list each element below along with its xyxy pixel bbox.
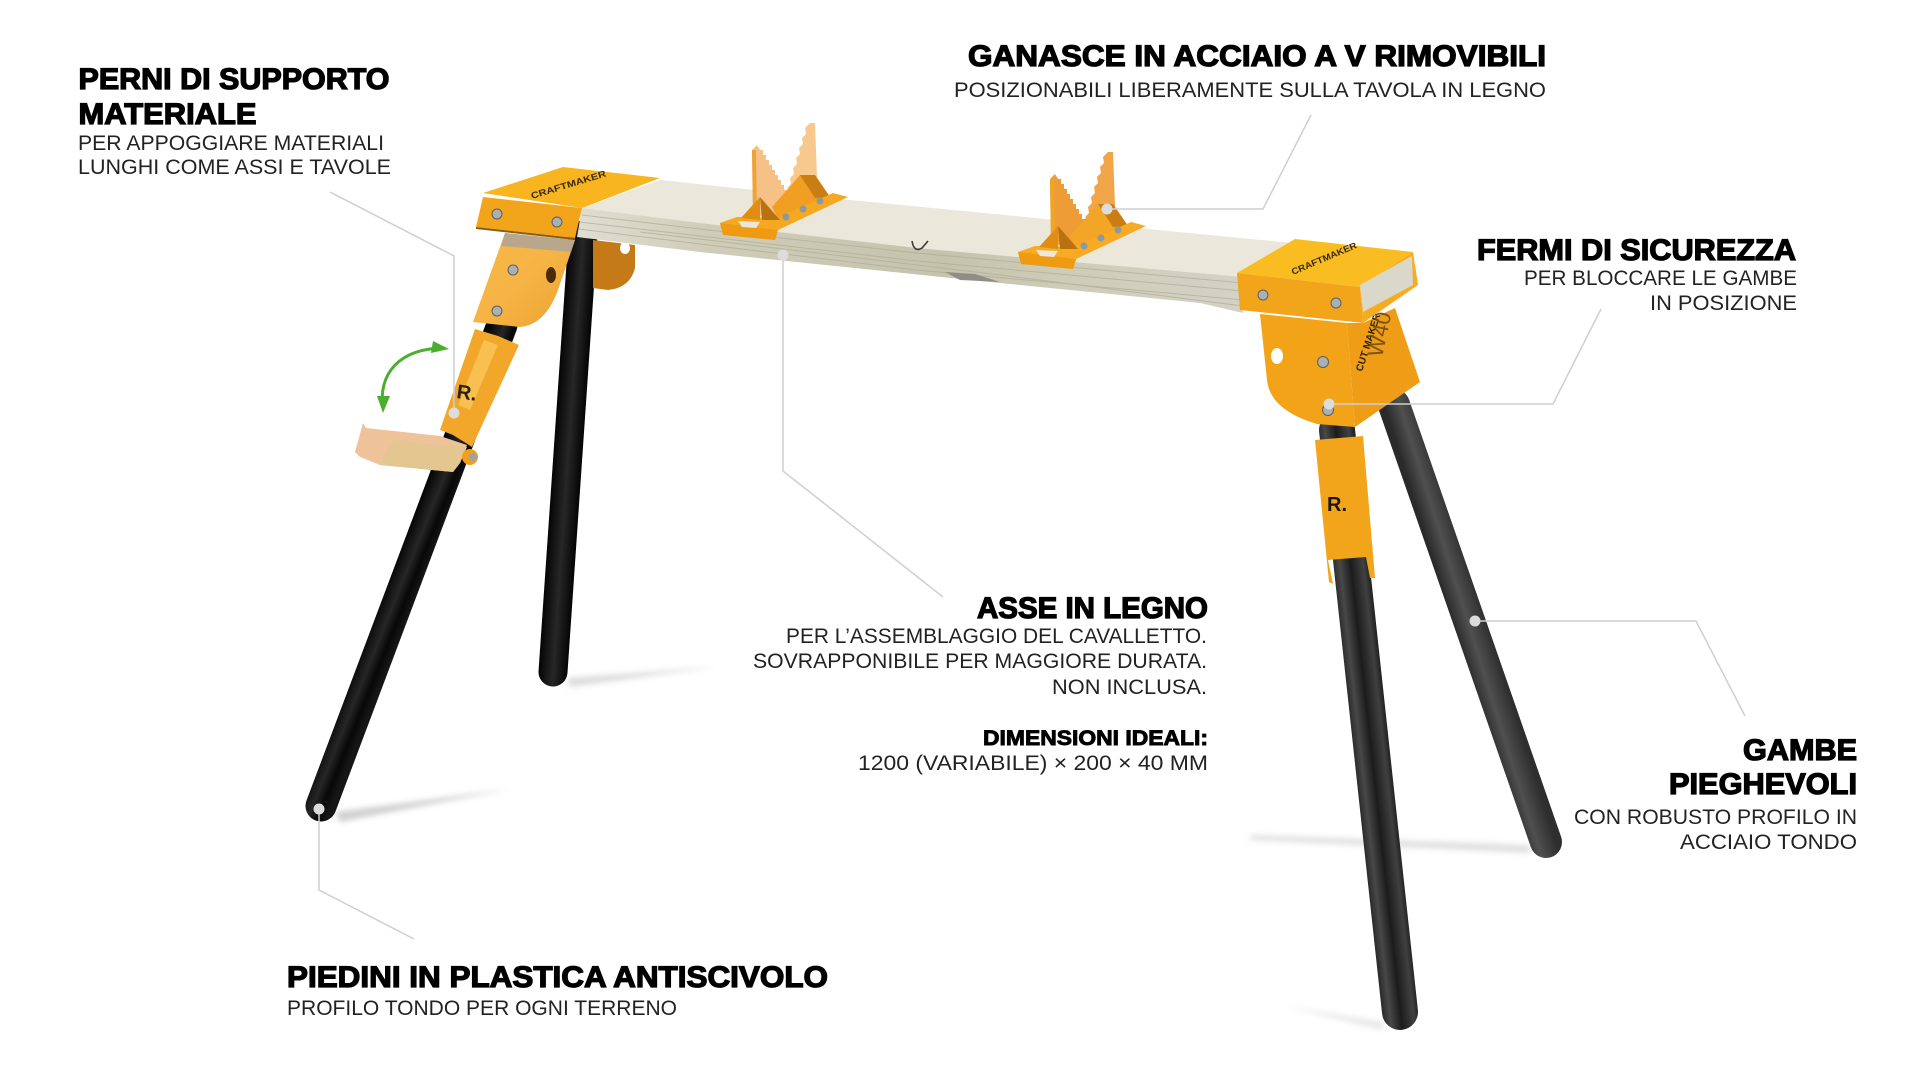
callout: asse in legno: NON INCLUSA. [1052,675,1207,699]
product: folding sawhorse [321,123,1546,1030]
left front leg [321,325,502,806]
dimensioni ideali: DIMENSIONI IDEALI: [983,726,1208,750]
leader: fermi di sicurezza [1324,309,1601,410]
left leg sleeve: R. [455,381,478,406]
left top bracket [476,167,660,240]
leader: gambe pieghevoli [1470,616,1745,716]
left lower bracket [473,233,575,327]
callout: gambe pieghevoli: CON ROBUSTO PROFILO IN [1574,805,1857,829]
brand text on bracket: CRAFTMAKER [1290,240,1359,277]
support pin folded out [355,423,478,472]
right leg sleeve [1315,436,1375,584]
callout: asse in legno: ASSE IN LEGNO [977,592,1208,625]
W40 mark: W40 [1362,310,1396,359]
callout: perni di supporto materiale: PER APPOGGIARE MATERIALI [78,131,384,155]
rear left bracket [593,240,635,290]
callout: gambe pieghevoli [1574,734,1857,854]
steel V jaw 1 [720,123,848,240]
leader: ganasce [1102,115,1311,214]
callout: perni di supporto materiale: MATERIALE [78,98,256,131]
callout: asse in legno: PER L’ASSEMBLAGGIO DEL CAVALLETTO. [786,624,1207,648]
right front leg [1337,430,1400,1012]
icon: green double arrow [377,341,449,413]
callout: fermi di sicurezza: IN POSIZIONE [1650,291,1797,315]
callout: perni di supporto materiale: PERNI DI SUPPORTO [78,63,390,96]
callout: perni di supporto materiale: LUNGHI COME ASSI E TAVOLE [78,155,391,179]
callout: asse in legno: 1200 (VARIABILE) × 200 × 40 MM [858,751,1208,775]
callout: ganasce in acciaio: POSIZIONABILI LIBERAMENTE SULLA TAVOLA IN LEGNO [954,78,1546,102]
leader: perni di supporto [330,192,460,418]
callout: gambe pieghevoli: PIEGHEVOLI [1669,768,1857,801]
callout: piedini in plastica [287,961,828,1020]
right top bracket [1237,239,1418,323]
callout: ganasce in acciaio [954,40,1546,102]
callout: gambe pieghevoli: GAMBE [1743,734,1857,767]
brand text on bracket: CRAFTMAKER [530,168,608,201]
callout: fermi di sicurezza: FERMI DI SICUREZZA [1477,234,1796,267]
steel V jaw 2 [1018,152,1146,269]
callout: fermi di sicurezza: PER BLOCCARE LE GAMBE [1524,266,1797,290]
callout: perni di supporto materiale [78,63,391,179]
wooden board [577,180,1292,313]
floor shadows [335,667,1530,1030]
model text on bracket: CUT MAKER [1354,312,1384,373]
callout: ganasce in acciaio: GANASCE IN ACCIAIO A V RIMOVIBILI [968,40,1546,73]
callout: asse in legno: SOVRAPPONIBILE PER MAGGIORE DURATA. [753,649,1207,673]
rear right leg [1394,405,1546,842]
callout: piedini in plastica: PIEDINI IN PLASTICA ANTISCIVOLO [287,961,828,994]
callout: gambe pieghevoli: ACCIAIO TONDO [1680,830,1857,854]
callout: piedini in plastica: PROFILO TONDO PER OGNI TERRENO [287,996,677,1020]
left leg sleeve [440,329,519,447]
right leg sleeve: R. [1327,494,1347,516]
callout: fermi di sicurezza [1477,234,1797,315]
right lower bracket [1260,308,1420,427]
callout: asse in legno [753,592,1208,775]
leader: piedini [314,804,414,939]
rear left leg [553,235,583,672]
leader: asse in legno [778,250,943,597]
